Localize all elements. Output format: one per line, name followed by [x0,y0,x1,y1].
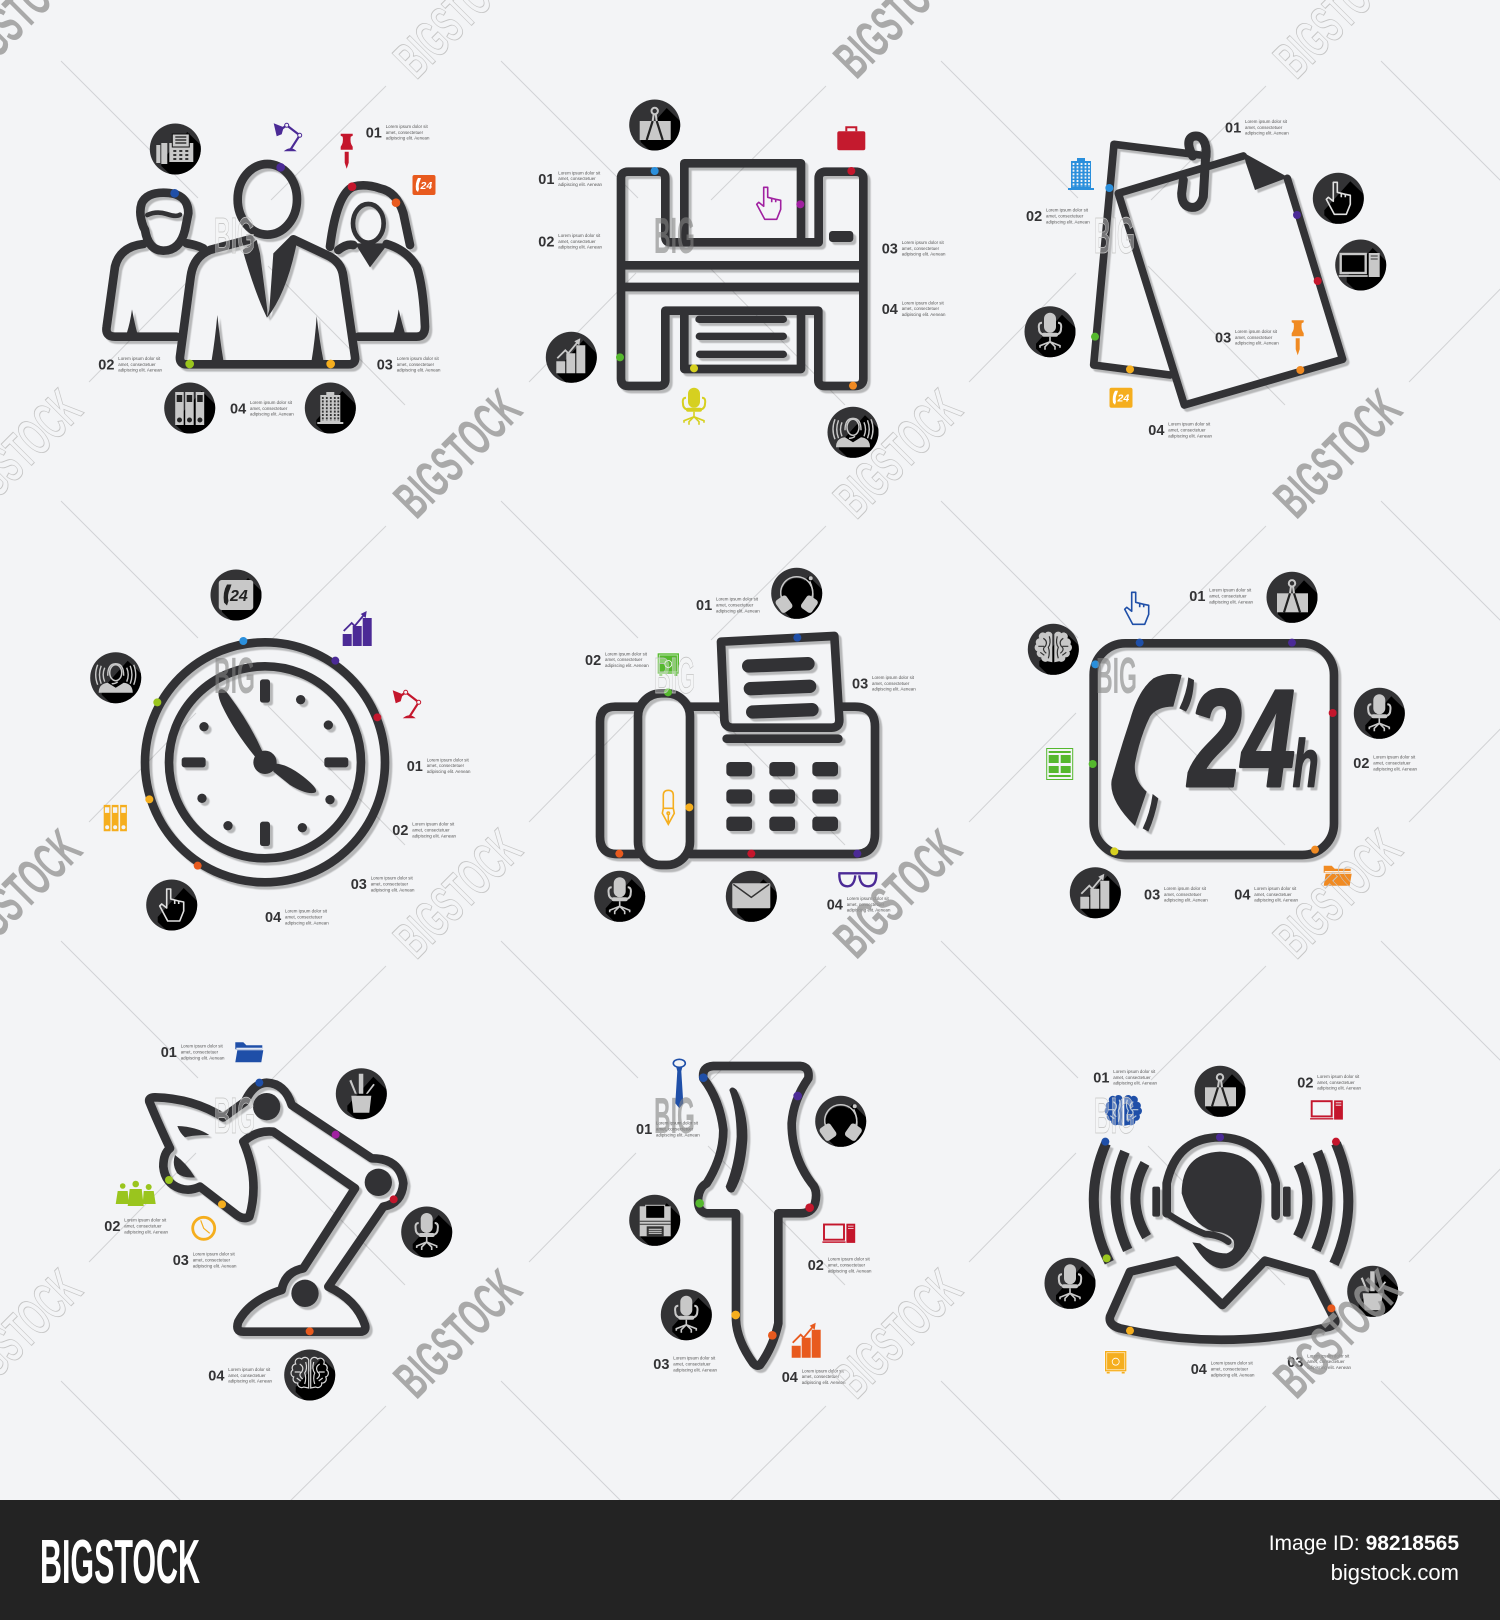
label 03: adipiscing elit. Aenean [673,1367,718,1372]
label 02: amet, consectetuer [118,362,156,367]
icon: pin [341,134,353,169]
label 02 [585,651,649,669]
icon: binders badge [164,382,232,450]
label 02: Lorem ipsum dolor sit [605,651,648,656]
panel: team [98,123,441,450]
label 01: amet, consectetuer [716,602,754,608]
icon: team [116,1181,156,1206]
label 01: Lorem ipsum dolor sit [427,757,469,762]
24h phone outline [1094,643,1334,855]
label 04 [1191,1361,1255,1378]
label 02: amet, consectetuer [1046,214,1084,218]
label 02: Lorem ipsum dolor sit [828,1257,870,1262]
label 02: Lorem ipsum dolor sit [1046,208,1089,213]
label 04 [782,1368,846,1386]
label 02: 02 [1026,209,1042,225]
connector dots [1091,184,1322,374]
24h phone outline: 24 [1186,662,1295,816]
label 04: 04 [1148,423,1164,439]
label 02: 02 [98,357,114,373]
label 02: adipiscing elit. Aenean [558,245,603,250]
label 02 [98,356,163,374]
label 04: Lorem ipsum dolor sit [802,1368,844,1373]
label 01: adipiscing elit. Aenean [427,769,471,774]
label 04: 04 [782,1370,798,1386]
fax outline [600,636,875,865]
watermarks: BIGSTOCK [383,819,533,969]
notes outline [1094,136,1343,405]
icon: chair badge [401,1206,469,1274]
icon: hand badge [1313,173,1380,240]
label 01: amet, consectetuer [181,1050,219,1054]
icon: fax badge [150,124,217,191]
label 01: Lorem ipsum dolor sit [1245,119,1288,124]
label 03: Lorem ipsum dolor sit [1235,329,1278,334]
label 03 [653,1356,718,1373]
label 04: Lorem ipsum dolor sit [250,400,293,405]
label 04: adipiscing elit. Aenean [1254,898,1299,903]
label 02: Lorem ipsum dolor sit [412,822,455,827]
label 01: 01 [1093,1071,1109,1087]
label 04: Lorem ipsum dolor sit [847,896,889,901]
connector dots [1101,1133,1340,1335]
label 03 [173,1252,237,1269]
label 02: adipiscing elit. Aenean [412,833,457,838]
label 01: adipiscing elit. Aenean [558,182,603,187]
label 02: adipiscing elit. Aenean [124,1229,169,1234]
label 04: adipiscing elit. Aenean [902,312,946,317]
label 04: 04 [1191,1362,1207,1378]
icon: computer [822,1224,855,1243]
icon: folder [1324,866,1352,886]
label 04: adipiscing elit. Aenean [847,908,891,913]
image id: Image ID: 98218565 [1269,1532,1459,1555]
text: BIG [1096,647,1137,704]
connector dots [1089,639,1337,855]
label 02 [808,1257,872,1274]
connector dots [695,1073,814,1340]
small BIG watermarks: BIG [214,647,255,704]
panel: push pin [629,1059,883,1386]
label 03: adipiscing elit. Aenean [872,687,916,692]
icon: brain [1105,1095,1142,1126]
icon: pencils badge [1347,1266,1415,1333]
icon: chair badge [1044,1258,1112,1325]
icon: lamp [274,123,302,151]
icon: 24h [1110,388,1132,408]
icon: chair badge [661,1289,728,1357]
label 03: Lorem ipsum dolor sit [193,1252,235,1257]
label 04: Lorem ipsum dolor sit [285,909,328,914]
label 01: Lorem ipsum dolor sit [716,597,759,602]
icon: 24h badge [210,570,278,637]
label 04: adipiscing elit. Aenean [1168,433,1213,438]
label 01: 01 [636,1122,652,1138]
label 03: amet, consectetuer [673,1362,711,1366]
label 03 [1215,329,1279,346]
label 02: adipiscing elit. Aenean [1373,766,1418,771]
label 02: amet, consectetuer [124,1224,162,1228]
label 02: adipiscing elit. Aenean [605,663,649,668]
label 01: adipiscing elit. Aenean [716,608,760,613]
label 02 [1353,755,1418,772]
panel: printer [538,100,946,474]
label 03: adipiscing elit. Aenean [397,368,441,373]
icon: tie [673,1059,685,1108]
label 02 [1297,1074,1362,1092]
label 01: 01 [161,1045,177,1061]
label 03 [1144,886,1208,904]
icon: chair badge [1354,688,1421,755]
label 02 [392,822,457,839]
label 01: Lorem ipsum dolor sit [181,1044,223,1049]
label 01: Lorem ipsum dolor sit [558,170,601,175]
label 02: 02 [1353,756,1369,772]
label 01: 01 [366,126,382,142]
icon: safe [1105,1351,1127,1373]
label 03: 03 [852,676,868,692]
label 03: 03 [1215,330,1231,346]
footer bar [0,1500,1500,1620]
icon: 24h badge: 24 [229,588,248,605]
label 02: amet, consectetuer [412,828,450,832]
icon: chart badge [1070,867,1137,935]
icon: headphones badge [771,568,839,635]
label 01: adipiscing elit. Aenean [386,136,430,141]
label 04: adipiscing elit. Aenean [802,1380,846,1385]
icon: hand [1125,592,1149,624]
label 02: amet, consectetuer [605,657,643,662]
label 04: amet, consectetuer [1211,1366,1249,1372]
label 02 [1026,208,1090,225]
text: BIG [1094,1087,1135,1144]
icon: brain outline badge [284,1350,352,1417]
label 04: 04 [230,401,246,417]
label 02: adipiscing elit. Aenean [1046,219,1090,224]
icon: hand badge [146,880,214,947]
label 03: Lorem ipsum dolor sit [902,240,944,245]
icon: safe [657,653,679,675]
label 03: 03 [1287,1355,1303,1371]
label 02 [104,1218,169,1235]
label 01 [636,1121,700,1138]
label 03: amet, consectetuer [1164,892,1202,897]
label 03: amet, consectetuer [193,1258,231,1262]
label 04: Lorem ipsum dolor sit [1168,422,1211,427]
label 01: 01 [407,759,423,775]
icon: chair badge [1024,306,1092,374]
icon: glasses [838,873,877,886]
label 01: adipiscing elit. Aenean [1245,131,1289,136]
connector dots [616,167,857,390]
icon: printer badge [629,1195,697,1262]
connector dots [165,1079,398,1335]
label 01 [1093,1069,1158,1086]
label 03: adipiscing elit. Aenean [902,252,946,257]
small BIG watermarks: BIG [214,207,255,264]
icon: headphones badge [815,1096,883,1163]
icon: pen [662,790,674,824]
label 04: 04 [1234,887,1250,903]
label 03: amet, consectetuer [902,246,940,251]
label 04: amet, consectetuer [847,902,885,907]
watermarks: BIGSTOCK [823,379,973,529]
icon: pencils badge [336,1068,403,1136]
small BIG watermarks: BIG [654,1087,695,1144]
label 01: amet, consectetuer [1245,125,1283,130]
watermarks: BIGSTOCK [1263,1259,1413,1409]
panel: 24h phone [1028,572,1421,935]
label 01: adipiscing elit. Aenean [181,1055,225,1060]
icon: agent badge [828,407,895,474]
label 02: 02 [392,823,408,839]
label 03 [377,356,441,374]
watermarks: BIGSTOCK [823,1259,973,1409]
icon: 24h: 24 [420,180,432,192]
label 01: amet, consectetuer [427,763,465,768]
label 03: amet, consectetuer [397,362,435,367]
icon: building badge [305,382,372,450]
text: BIG [1094,207,1135,264]
label 04: 04 [208,1369,224,1385]
connector dots [615,634,861,858]
icon: chart badge [546,332,613,399]
label 03: amet, consectetuer [872,681,910,686]
icon: chart [792,1323,821,1358]
label 04 [1234,886,1299,904]
watermarks: BIGSTOCK [1263,819,1413,969]
label 02: adipiscing elit. Aenean [828,1268,872,1273]
label 04: 04 [882,302,898,318]
label 02: 02 [585,653,601,669]
label 02: 02 [808,1258,824,1274]
icon: chair badge [594,871,662,938]
watermarks: BIGSTOCK [383,379,533,529]
watermarks: BIGSTOCK [383,1259,533,1409]
icon: computer [1310,1100,1343,1120]
icon: computer badge [1335,240,1403,307]
icon: chair [683,388,705,425]
footer bar: BIGSTOCK [40,1528,200,1597]
connector dots [145,637,381,870]
label 01 [538,170,603,188]
24h phone outline: h [1293,728,1319,802]
watermarks: BIGSTOCK [1263,379,1413,529]
label 03: adipiscing elit. Aenean [371,887,415,892]
clock face [145,642,385,882]
label 01: Lorem ipsum dolor sit [1209,588,1252,593]
label 02: Lorem ipsum dolor sit [558,233,601,238]
label 04: Lorem ipsum dolor sit [228,1367,271,1372]
printer outline [621,163,863,386]
label 04: amet, consectetuer [902,306,940,311]
label 04 [827,896,891,914]
label 01 [1225,119,1289,136]
label 03: Lorem ipsum dolor sit [1164,886,1207,891]
label 03: 03 [653,1357,669,1373]
label 04: amet, consectetuer [1168,428,1206,432]
icon: clock [193,1217,215,1239]
icon: envelope badge [726,871,793,938]
label 04: amet, consectetuer [1254,892,1292,897]
label 01: amet, consectetuer [656,1126,694,1132]
label 01: 01 [1225,121,1241,137]
label 03: Lorem ipsum dolor sit [872,675,915,680]
icon: chart [343,611,372,646]
people outline [106,164,425,364]
label 02: amet, consectetuer [828,1262,866,1268]
icon: brain badge [1028,624,1095,691]
label 04: Lorem ipsum dolor sit [1254,886,1297,891]
label 02: Lorem ipsum dolor sit [1373,755,1416,760]
label 02: adipiscing elit. Aenean [1317,1086,1362,1091]
label 03 [852,675,916,692]
icon: binders [104,805,127,831]
icon: agent badge [90,652,158,720]
label 01: Lorem ipsum dolor sit [1113,1069,1156,1074]
label 03 [882,240,946,258]
label 03: adipiscing elit. Aenean [1235,341,1279,346]
label 04 [882,300,946,318]
label 03: adipiscing elit. Aenean [193,1263,237,1268]
label 04: amet, consectetuer [285,914,323,920]
icon: spreadsheet [1047,748,1073,780]
label 04 [230,400,294,418]
label 01: 01 [696,598,712,614]
site url: bigstock.com [1331,1560,1459,1585]
panel: desk lamp [104,1042,469,1417]
icon: folder [235,1042,263,1062]
small BIG watermarks [214,207,1137,1144]
icon: 24h: 24 [1116,393,1129,405]
small BIG watermarks: BIG [654,647,695,704]
icon: binder clip badge [629,100,697,167]
watermarks: BIGSTOCK [823,819,973,969]
label 01: adipiscing elit. Aenean [1113,1081,1158,1086]
icon: building [1068,158,1094,190]
icon: hand [757,187,781,219]
icon: binder clip badge [1194,1066,1262,1133]
panel: clock [90,570,471,947]
icon: pin [1292,320,1304,355]
label 04: 04 [265,910,281,926]
panel: notes [1024,119,1403,439]
label 01 [161,1044,225,1061]
label 03: amet, consectetuer [371,882,409,886]
small BIG watermarks: BIG [214,1087,255,1144]
label 03: amet, consectetuer [1307,1359,1345,1364]
agent outline [1094,1137,1348,1340]
label 04: adipiscing elit. Aenean [228,1379,273,1384]
label 03: 03 [351,877,367,893]
icon: binder clip badge [1266,572,1334,639]
label 03: 03 [1144,887,1160,903]
label 02: Lorem ipsum dolor sit [1317,1074,1360,1079]
icon: briefcase [837,127,865,150]
pin outline [698,1066,816,1366]
label 02 [538,233,603,250]
label 01: adipiscing elit. Aenean [656,1132,700,1137]
label 02: Lorem ipsum dolor sit [118,356,161,361]
label 04: adipiscing elit. Aenean [1211,1372,1255,1377]
label 01: Lorem ipsum dolor sit [656,1121,699,1126]
label 04: adipiscing elit. Aenean [250,412,294,417]
label 04: amet, consectetuer [250,406,288,411]
label 03: Lorem ipsum dolor sit [371,876,413,881]
label 02: 02 [538,235,554,251]
label 01: adipiscing elit. Aenean [1209,599,1254,604]
label 02: adipiscing elit. Aenean [118,368,163,373]
label 01 [407,757,471,775]
panel: fax [585,568,916,938]
label 03: Lorem ipsum dolor sit [673,1356,716,1361]
label 02: amet, consectetuer [558,239,596,244]
label 02: Lorem ipsum dolor sit [124,1218,167,1223]
label 01: amet, consectetuer [386,130,424,135]
icon: lamp [393,690,421,718]
label 01: Lorem ipsum dolor sit [386,124,428,129]
label 01: 01 [1189,589,1205,605]
label 04: amet, consectetuer [802,1374,840,1379]
label 03 [351,876,415,893]
label 04: amet, consectetuer [228,1373,266,1378]
small BIG watermarks: BIG [654,207,695,264]
label 01: amet, consectetuer [558,176,596,181]
icon: 24h [412,175,436,195]
label 04 [1148,422,1213,439]
label 03: Lorem ipsum dolor sit [1307,1353,1350,1358]
label 03: amet, consectetuer [1235,335,1273,340]
label 03: Lorem ipsum dolor sit [397,356,439,361]
label 03: adipiscing elit. Aenean [1164,898,1208,903]
label 03 [1287,1353,1352,1371]
label 01: amet, consectetuer [1113,1075,1151,1080]
label 01 [366,124,430,142]
label 04 [265,909,329,926]
label 03: 03 [173,1253,189,1269]
label 04 [208,1367,273,1384]
label 02: amet, consectetuer [1317,1080,1355,1085]
label 02: 02 [104,1219,120,1235]
label 02: 02 [1297,1076,1313,1092]
label 04: 04 [827,897,843,913]
label 03: adipiscing elit. Aenean [1307,1365,1352,1370]
label 04: adipiscing elit. Aenean [285,920,329,925]
label 04: Lorem ipsum dolor sit [902,300,944,305]
label 01: amet, consectetuer [1209,594,1247,598]
connector dots [170,163,400,368]
lamp outline [149,1083,403,1332]
label 01 [1189,588,1254,605]
label 03: 03 [882,242,898,258]
label 04: Lorem ipsum dolor sit [1211,1361,1253,1366]
label 02: amet, consectetuer [1373,760,1411,766]
label 01: 01 [538,172,554,188]
label 01 [696,597,760,614]
panel: call agent [1044,1066,1415,1378]
label 03: 03 [377,357,393,373]
